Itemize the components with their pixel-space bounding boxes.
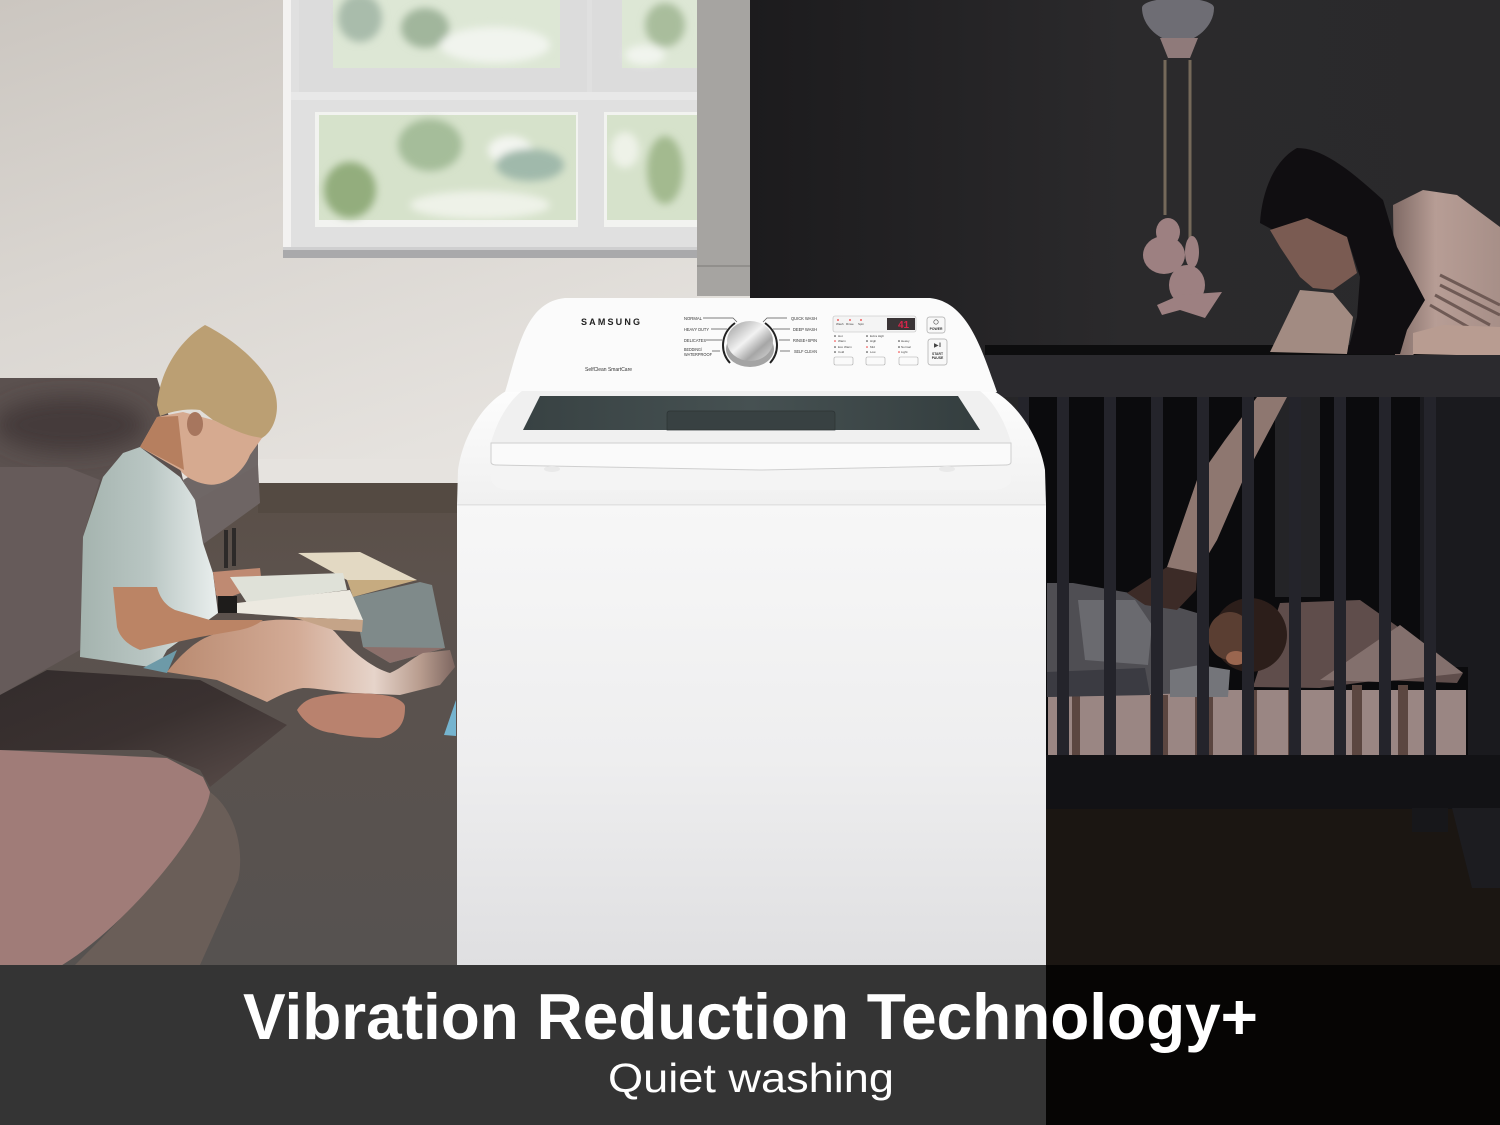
mother's hand bbox=[1127, 567, 1197, 610]
floor cushion bbox=[353, 582, 445, 663]
cycle labels right: QUICK WASH bbox=[791, 316, 817, 321]
cycle labels left: WATERPROOF bbox=[684, 352, 712, 357]
concrete pillar bbox=[697, 0, 750, 296]
option labels: Low bbox=[870, 350, 876, 354]
mobile toy bbox=[1142, 0, 1222, 318]
power button bbox=[927, 317, 945, 333]
cycle labels left: HEAVY DUTY bbox=[684, 327, 709, 332]
cycle labels right: DEEP WASH bbox=[793, 327, 817, 332]
cycle labels left: DELICATES bbox=[684, 338, 706, 343]
sweater back bbox=[1393, 190, 1500, 355]
cycle status and display panel bbox=[833, 316, 916, 332]
hair bbox=[1260, 148, 1425, 354]
stacked book bbox=[298, 552, 417, 593]
forearm on rail bbox=[1413, 325, 1500, 356]
head bbox=[140, 412, 262, 485]
dial bbox=[723, 321, 777, 367]
option labels bbox=[834, 334, 911, 354]
shoulder above the front panel bbox=[457, 390, 1046, 505]
cycle labels left: BEDDING/ bbox=[684, 347, 703, 352]
lower foot bbox=[297, 693, 405, 738]
blue book corner bbox=[444, 700, 456, 736]
lid with glass window bbox=[491, 391, 1011, 472]
cycle status and display panel: Rinse bbox=[846, 322, 854, 326]
start pause button: START bbox=[932, 352, 944, 356]
control console bbox=[505, 298, 997, 392]
books and cushion on floor bbox=[298, 552, 445, 663]
machine body bbox=[457, 505, 1046, 965]
side arm bbox=[197, 465, 260, 545]
cycle status and display panel: Spin bbox=[858, 322, 864, 326]
chest bbox=[1270, 290, 1353, 354]
main title: Vibration Reduction Technology+ bbox=[243, 980, 1258, 1053]
crib slats bbox=[1018, 397, 1436, 757]
neck shadow bbox=[140, 416, 184, 470]
option labels: Warm bbox=[838, 339, 846, 343]
option labels: High bbox=[870, 339, 877, 343]
option labels: Extra High bbox=[870, 334, 884, 338]
cycle labels left bbox=[684, 316, 712, 357]
subtitle: Quiet washing bbox=[608, 1055, 894, 1101]
cycle status and display panel: Wash bbox=[836, 322, 844, 326]
cycle labels right: RINSE+SPIN bbox=[793, 338, 817, 343]
left room background bbox=[0, 0, 750, 965]
face bbox=[1270, 218, 1357, 290]
sleeve stripes bbox=[1430, 275, 1500, 328]
sofa base bbox=[75, 792, 240, 965]
feature text: SelfClean SmartCare bbox=[585, 367, 632, 373]
washing machine bbox=[457, 298, 1046, 965]
raised leg bbox=[167, 620, 455, 702]
handle recess bbox=[491, 465, 1011, 490]
selector lines bbox=[703, 318, 790, 351]
mother leaning over crib bbox=[1260, 148, 1500, 356]
toy animal bbox=[1143, 218, 1222, 318]
arm bbox=[113, 587, 263, 650]
pink throw bbox=[0, 750, 210, 1005]
cycle labels right bbox=[791, 316, 817, 354]
option labels: Normal bbox=[901, 345, 911, 349]
cycle status and display panel: 41 bbox=[898, 320, 910, 331]
cycle labels right: SELF CLEAN bbox=[794, 349, 817, 354]
option buttons bbox=[834, 357, 918, 365]
cycle labels left: NORMAL bbox=[684, 316, 703, 321]
hand on book bbox=[213, 568, 262, 600]
mattress bbox=[1048, 685, 1466, 756]
start pause button bbox=[928, 339, 947, 365]
crib interior bbox=[1020, 397, 1500, 757]
boy reading bbox=[80, 325, 455, 738]
shorts bbox=[143, 650, 177, 673]
metal sofa leg bbox=[224, 530, 228, 568]
start pause button: ▶‖ bbox=[934, 343, 941, 349]
floor pillow bbox=[0, 670, 287, 787]
mother's arm bbox=[1167, 397, 1287, 573]
hair bbox=[157, 325, 277, 438]
brand: SAMSUNG bbox=[581, 317, 640, 327]
option labels: Mid bbox=[870, 345, 875, 349]
option labels: Eco Warm bbox=[838, 345, 852, 349]
option labels: Cold bbox=[838, 350, 845, 354]
option labels: Hot bbox=[838, 334, 843, 338]
open book bbox=[218, 573, 363, 632]
start pause button: PAUSE bbox=[932, 356, 944, 360]
crib top rail bbox=[985, 355, 1500, 397]
sofa bbox=[0, 378, 287, 1005]
crib bbox=[1018, 397, 1500, 888]
back cushions bbox=[0, 378, 197, 510]
striped bedding bbox=[1253, 600, 1463, 688]
seat cushion bbox=[0, 467, 100, 695]
t-shirt bbox=[80, 447, 218, 668]
option labels: Light bbox=[901, 350, 908, 354]
baby blanket bbox=[1047, 583, 1197, 697]
option labels: Heavy bbox=[901, 339, 910, 343]
ear bbox=[187, 412, 203, 436]
window bbox=[283, 0, 697, 258]
baby head bbox=[1208, 598, 1287, 672]
power button: POWER bbox=[930, 327, 943, 331]
right room background bbox=[750, 0, 1500, 965]
bottom caption band bbox=[0, 965, 1500, 1125]
